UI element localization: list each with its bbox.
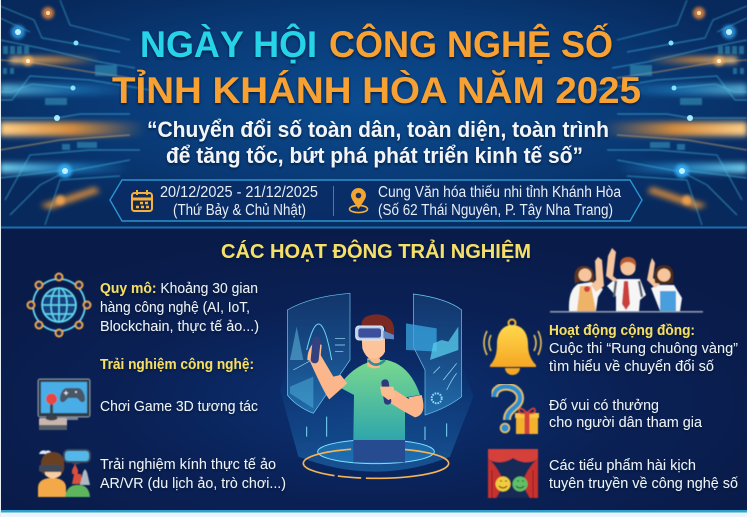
text: AR/VR experience: AR/VR (du lịch ảo, trò chơi...)	[100, 476, 286, 492]
icon: theatre curtains and masks	[488, 449, 538, 498]
light cone	[280, 363, 473, 472]
title: CÔNG NGHỆ SỐ	[329, 23, 613, 65]
text: comedy skits	[549, 458, 738, 492]
icon: location pin	[350, 188, 368, 213]
icon: cheering students	[550, 248, 703, 313]
bottom edge	[0, 510, 747, 517]
circuit art left	[0, 0, 150, 225]
icon: network globe	[27, 273, 91, 337]
text: community activities: tìm hiểu về chuyển đổi số	[549, 359, 714, 375]
slogan	[147, 117, 609, 168]
text: quizzes with prizes	[549, 398, 703, 431]
date text	[160, 184, 318, 219]
person	[307, 314, 423, 462]
text: comedy skits: tuyên truyền về công nghệ số	[549, 476, 738, 492]
circuit art right	[597, 0, 747, 225]
icon: game monitor and joystick	[38, 379, 90, 430]
text: quizzes with prizes: Đố vui có thưởng	[549, 398, 659, 414]
subheading: technology experience: Trải nghiệm công nghệ:	[100, 357, 254, 373]
text: scale of event	[100, 281, 259, 335]
date text: 20/12/2025 - 21/12/2025	[160, 184, 318, 201]
slogan: để tăng tốc, bứt phá phát triển kinh tế số”	[166, 143, 583, 168]
holographic platform rings	[303, 417, 449, 478]
text: scale of event: Blockchain, thực tế ảo...)	[100, 319, 259, 335]
icon: question mark and gift	[494, 387, 539, 434]
text: scale of event: Quy mô: Khoảng 30 gian	[100, 281, 258, 297]
text: 3D games: Chơi Game 3D tương tác	[100, 399, 258, 415]
text: community activities: Hoạt động cộng đồng:	[549, 323, 695, 339]
slogan: “Chuyển đổi số toàn dân, toàn diện, toàn trình	[147, 117, 609, 142]
student left	[569, 257, 604, 311]
title	[112, 23, 641, 111]
venue text	[378, 184, 621, 219]
right holographic panel	[406, 294, 462, 415]
icon: ringing bell	[484, 320, 541, 375]
venue text: (Số 62 Thái Nguyên, P. Tây Nha Trang)	[378, 202, 613, 219]
header panel	[0, 0, 747, 227]
title: TỈNH KHÁNH HÒA NĂM 2025	[112, 69, 641, 111]
icon: calendar	[132, 190, 152, 211]
text: community activities: Cuộc thi “Rung chuông vàng”	[549, 341, 738, 357]
student middle	[606, 248, 646, 311]
date text: (Thứ Bảy & Chủ Nhật)	[173, 202, 306, 219]
text: AR/VR experience: Trải nghiệm kính thực tế ảo	[100, 457, 276, 473]
left holographic panel	[287, 293, 350, 413]
student right	[647, 258, 682, 311]
activities heading: CÁC HOẠT ĐỘNG TRẢI NGHIỆM	[221, 239, 531, 263]
text: comedy skits: Các tiểu phẩm hài kịch	[549, 458, 696, 474]
text: community activities	[549, 323, 738, 375]
activities panel	[0, 226, 747, 511]
central illustration: VR user with holographic panels	[280, 293, 473, 478]
date and venue banner	[110, 180, 642, 221]
venue text: Cung Văn hóa thiếu nhi tỉnh Khánh Hòa	[378, 184, 621, 201]
left edge	[0, 0, 1, 517]
text: AR/VR experience	[100, 457, 286, 492]
icon: person with VR headset	[38, 450, 90, 497]
text: scale of event: hàng công nghệ (AI, IoT,	[100, 300, 250, 316]
title: NGÀY HỘI	[140, 23, 317, 65]
text: quizzes with prizes: cho người dân tham gia	[549, 415, 703, 431]
